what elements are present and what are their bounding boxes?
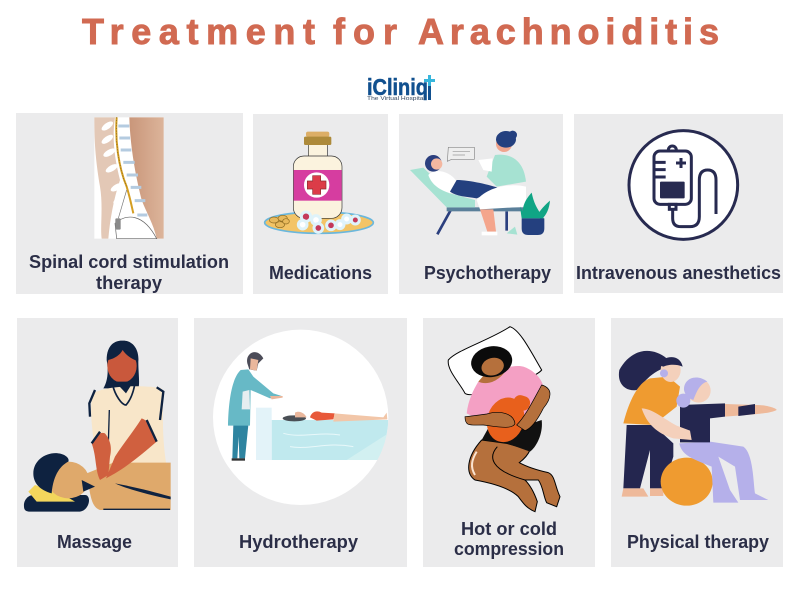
panel: massage xyxy=(17,318,178,567)
panel: psychotherapy xyxy=(399,114,563,294)
title xyxy=(82,11,719,52)
label: Hot or cold xyxy=(461,519,557,539)
icon: spine with stimulator xyxy=(94,117,164,239)
logo: iCliniq: The Virtual Hospital xyxy=(367,96,425,102)
icon: massage therapist and client xyxy=(24,341,171,512)
title: Treatment xyxy=(82,11,315,52)
label line two: compression xyxy=(454,539,564,559)
panel: hot or cold compression xyxy=(423,318,595,567)
label: Physical therapy xyxy=(627,532,769,552)
icon: woman with hot water bottle xyxy=(448,327,560,512)
label: Spinal cord stimulation xyxy=(29,252,229,272)
label line two: therapy xyxy=(96,273,162,293)
panel: medications xyxy=(253,114,388,294)
label: Intravenous anesthetics xyxy=(576,263,781,283)
icon: therapist helping patient on exercise ball xyxy=(619,351,777,506)
label: Psychotherapy xyxy=(424,263,551,283)
panel: physical therapy xyxy=(611,318,783,567)
panel: spinal cord stimulation therapy xyxy=(16,113,243,294)
icon: hydrotherapy pool scene xyxy=(213,330,388,505)
label: Massage xyxy=(57,532,132,552)
title: Arachnoiditis xyxy=(418,11,719,52)
label: Medications xyxy=(269,263,372,283)
icon: therapist and patient xyxy=(410,131,550,235)
panel: intravenous anesthetics xyxy=(574,114,783,293)
logo: iCliniq: iCliniq xyxy=(367,74,428,100)
icon: medicine bottle and pills xyxy=(265,132,373,233)
icon: IV bag xyxy=(629,131,738,239)
panel: hydrotherapy xyxy=(194,318,407,567)
title: for xyxy=(333,11,397,52)
label: Hydrotherapy xyxy=(239,532,358,552)
